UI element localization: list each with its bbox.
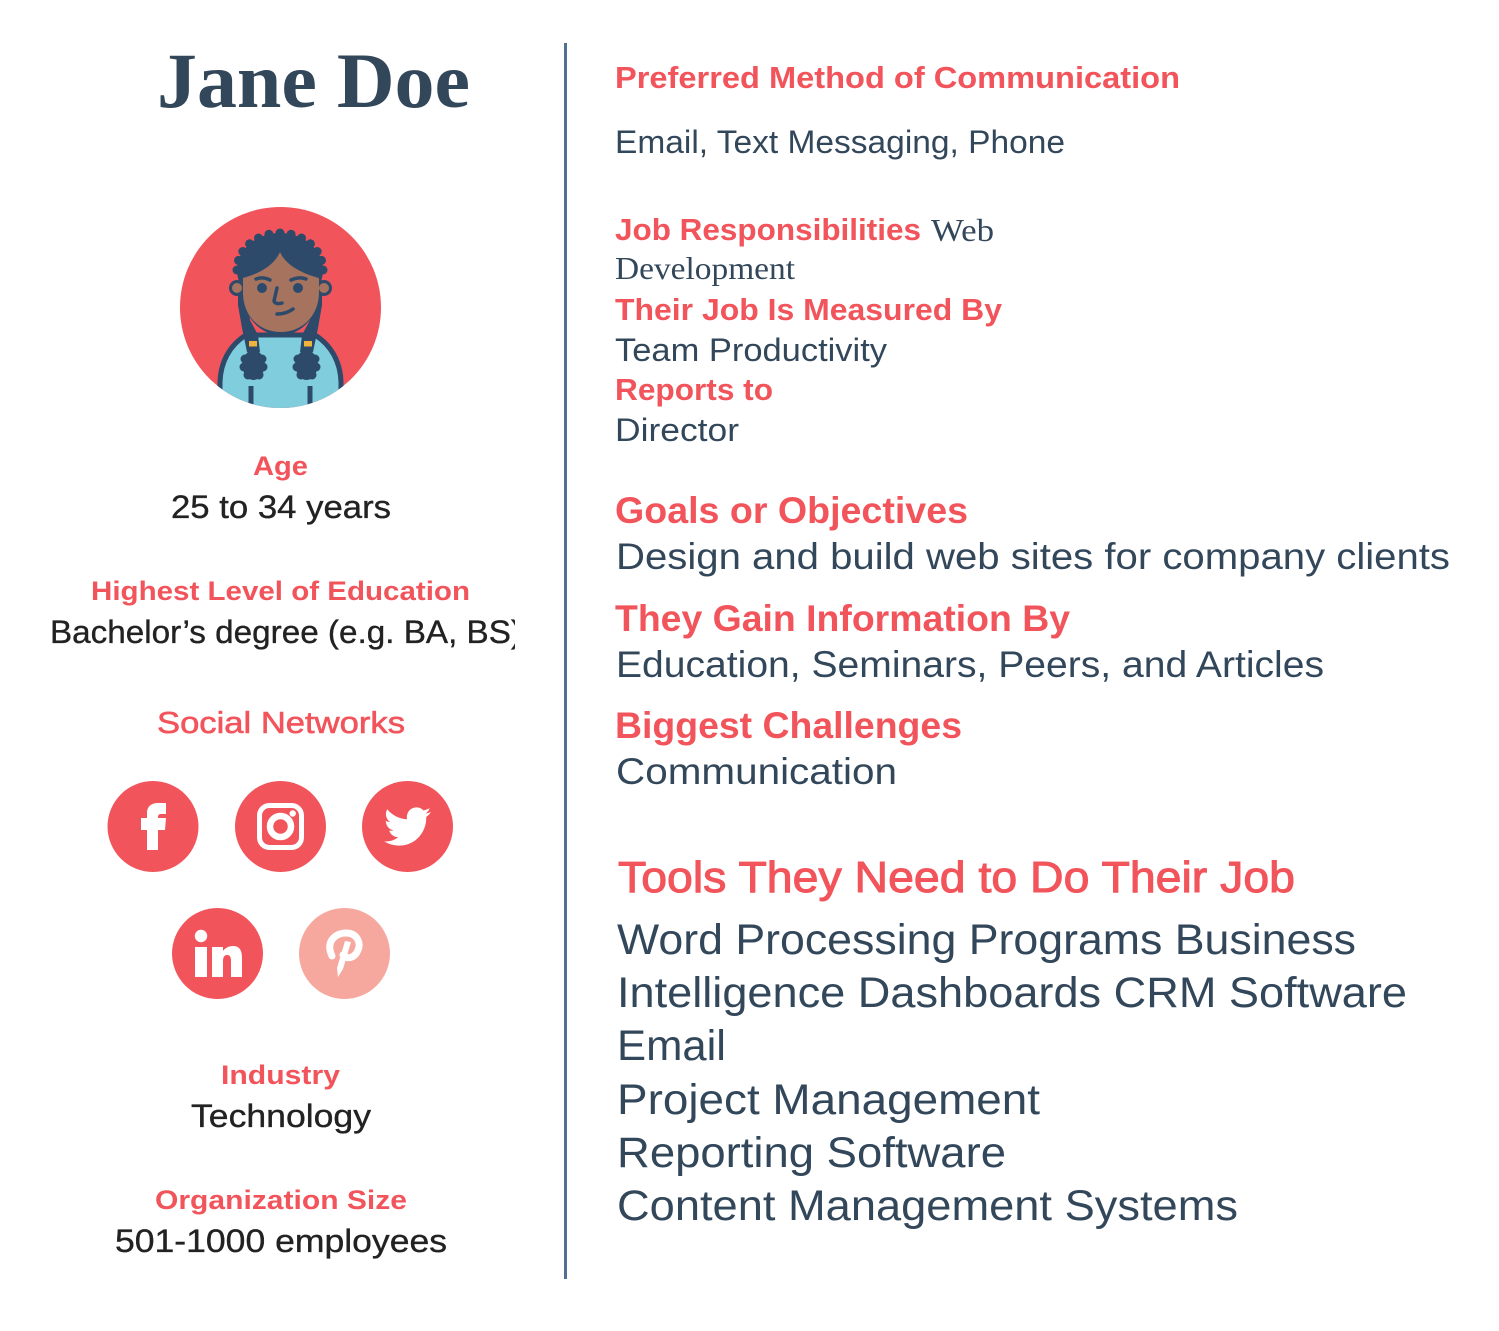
- job measured by: [615, 292, 1003, 368]
- information sources: Education, Seminars, Peers, and Articles: [616, 644, 1324, 685]
- organization size: Organization Size: [155, 1185, 407, 1215]
- organization size: 501-1000 employees: [115, 1223, 447, 1259]
- goals or objectives: [615, 490, 1450, 577]
- job responsibilities: [615, 212, 994, 286]
- biggest challenges: Communication: [616, 751, 897, 792]
- tools list: [617, 916, 1407, 1230]
- industry: Industry: [221, 1060, 340, 1090]
- tools heading: Tools They Need to Do Their Job: [618, 853, 1295, 902]
- goals or objectives: Goals or Objectives: [615, 490, 968, 531]
- icon: facebook: [108, 781, 198, 872]
- social networks heading: Social Networks: [157, 705, 405, 740]
- education: Bachelor’s degree (e.g. BA, BS): [50, 614, 522, 650]
- industry: [191, 1060, 371, 1134]
- biggest challenges: [615, 705, 962, 792]
- preferred method of communication: [615, 60, 1180, 160]
- preferred method of communication: Preferred Method of Communication: [615, 60, 1180, 95]
- education: [50, 576, 522, 650]
- title: Jane Doe: [157, 37, 470, 124]
- tools list: Reporting Software: [617, 1129, 1006, 1177]
- tools list: Content Management Systems: [617, 1182, 1238, 1230]
- job responsibilities: Web: [931, 212, 994, 248]
- biggest challenges: Biggest Challenges: [615, 705, 962, 746]
- column divider: [564, 43, 567, 1279]
- icon: linkedin: [172, 908, 263, 999]
- reports to: [615, 372, 773, 448]
- job responsibilities: Job Responsibilities: [615, 212, 921, 247]
- age: [171, 451, 391, 525]
- reports to: Director: [615, 412, 739, 448]
- tools list: Email: [617, 1022, 726, 1070]
- tools list: Project Management: [617, 1076, 1040, 1124]
- tools list: Word Processing Programs Business: [617, 916, 1356, 964]
- preferred method of communication: Email, Text Messaging, Phone: [615, 124, 1065, 160]
- icon: avatar: [180, 207, 381, 420]
- tools list: Intelligence Dashboards CRM Software: [617, 969, 1407, 1017]
- age: Age: [253, 451, 308, 481]
- information sources: [615, 598, 1324, 685]
- information sources: They Gain Information By: [615, 598, 1070, 639]
- organization size: [115, 1185, 447, 1259]
- industry: Technology: [191, 1098, 371, 1134]
- reports to: Reports to: [615, 372, 773, 407]
- icon: pinterest: [299, 908, 390, 999]
- goals or objectives: Design and build web sites for company clients: [616, 536, 1450, 577]
- job measured by: Their Job Is Measured By: [615, 292, 1003, 327]
- education: Highest Level of Education: [91, 576, 470, 606]
- job responsibilities: Development: [615, 250, 795, 286]
- job measured by: Team Productivity: [615, 332, 887, 368]
- icon: twitter: [362, 781, 453, 872]
- age: 25 to 34 years: [171, 489, 391, 525]
- icon: instagram: [235, 781, 326, 872]
